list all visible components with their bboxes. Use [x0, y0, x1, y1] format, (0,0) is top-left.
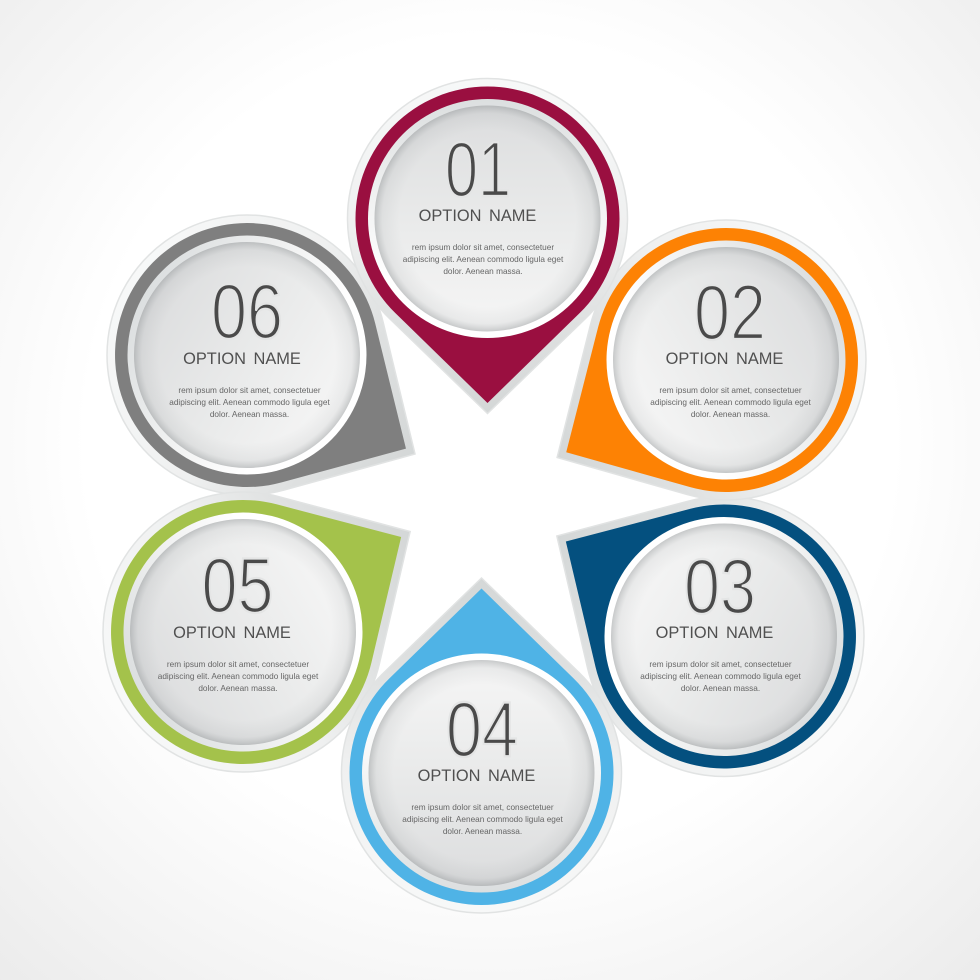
body text: dolor. Aenean massa. [443, 827, 522, 836]
pin shape: orange [487, 169, 917, 579]
number 04: 04 [446, 685, 518, 773]
heading: OPTION NAME [666, 350, 783, 368]
number 05: 05 [202, 541, 274, 629]
body text [650, 386, 811, 419]
panel: option 05 [51, 412, 482, 824]
body text: adipiscing elit. Aenean commodo ligula eget [169, 398, 330, 407]
panel: option 06 [55, 163, 486, 575]
body text: adipiscing elit. Aenean commodo ligula eget [402, 815, 563, 824]
body text [169, 386, 330, 419]
body text [640, 660, 801, 693]
panel: option 02 [487, 169, 917, 579]
number 01: 01 [445, 125, 511, 213]
pin shape: navy [485, 416, 916, 829]
body text: rem ipsum dolor sit amet, consectetuer [411, 803, 554, 812]
panel: option 04 [342, 578, 622, 913]
body text: rem ipsum dolor sit amet, consectetuer [178, 386, 321, 395]
number 02: 02 [694, 268, 766, 356]
number 06: 06 [211, 267, 283, 355]
body text: adipiscing elit. Aenean commodo ligula eget [403, 255, 564, 264]
heading: OPTION NAME [173, 624, 291, 642]
heading: OPTION NAME [183, 350, 301, 368]
panel: option 01 [348, 79, 628, 414]
body text: adipiscing elit. Aenean commodo ligula eget [650, 398, 811, 407]
heading: OPTION NAME [418, 767, 535, 785]
body text: dolor. Aenean massa. [198, 684, 278, 693]
number 03: 03 [684, 542, 756, 630]
heading: OPTION NAME [419, 207, 536, 225]
body text: adipiscing elit. Aenean commodo ligula eget [158, 672, 319, 681]
body text: dolor. Aenean massa. [210, 410, 289, 419]
body text: dolor. Aenean massa. [443, 267, 523, 276]
body text [403, 243, 564, 276]
pin shape: grey [55, 163, 486, 575]
body text: rem ipsum dolor sit amet, consectetuer [659, 386, 802, 395]
body text: adipiscing elit. Aenean commodo ligula eget [640, 672, 801, 681]
pin shape: sky blue [342, 578, 622, 913]
body text [158, 660, 319, 693]
pin shape: crimson [348, 79, 628, 414]
panel: option 03 [485, 416, 916, 829]
pin shape: green [51, 412, 482, 824]
body text: rem ipsum dolor sit amet, consectetuer [649, 660, 792, 669]
body text [402, 803, 563, 836]
body text: rem ipsum dolor sit amet, consectetuer [412, 243, 554, 252]
body text: rem ipsum dolor sit amet, consectetuer [167, 660, 309, 669]
body text: dolor. Aenean massa. [691, 410, 770, 419]
heading: OPTION NAME [656, 624, 773, 642]
body text: dolor. Aenean massa. [681, 684, 760, 693]
